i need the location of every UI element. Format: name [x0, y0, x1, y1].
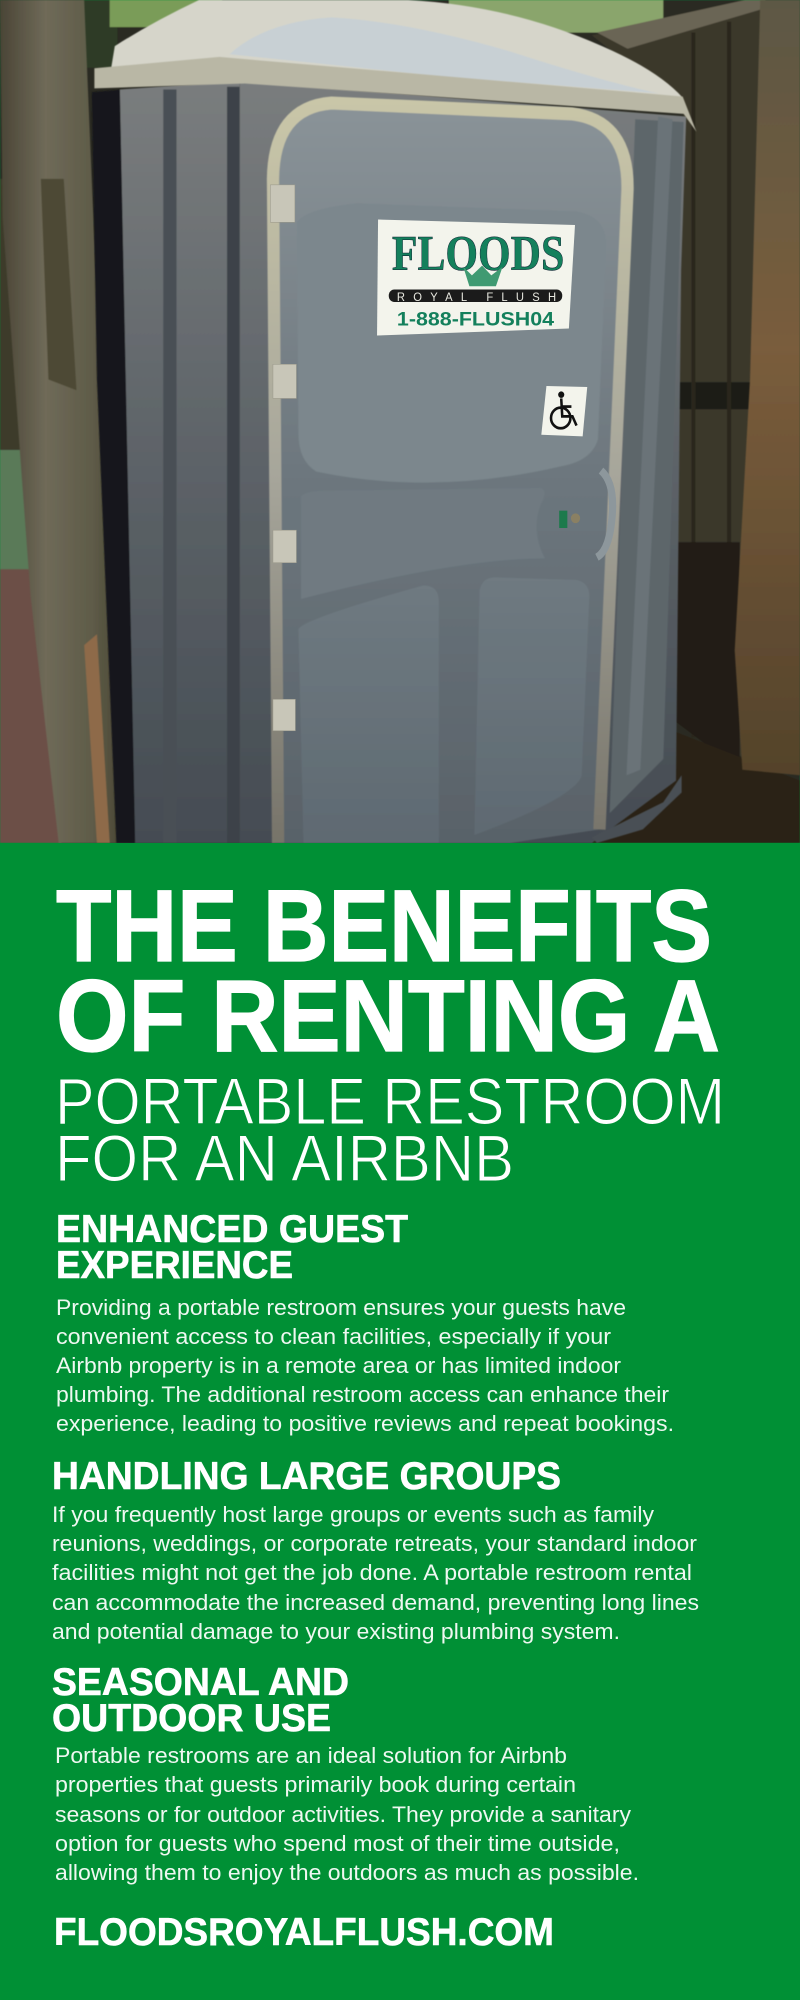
body text: seasonal and outdoor use: seasons or for outdoor activities. They provide a sanitary [55, 1802, 632, 1827]
heading: seasonal and outdoor use [52, 1661, 349, 1740]
door [273, 103, 628, 843]
right wooden post [735, 0, 800, 775]
body text: enhanced guest experience: convenient access to clean facilities, especially if your [56, 1324, 612, 1349]
body text: enhanced guest experience: Airbnb property is in a remote area or has limited indoor [56, 1353, 622, 1378]
title: FOR AN AIRBNB [55, 1121, 514, 1195]
sign: Floods Royal Flush logo [377, 220, 575, 336]
title: PORTABLE RESTROOM [55, 1064, 725, 1138]
body text: enhanced guest experience: experience, leading to positive reviews and repeat bookings. [56, 1411, 674, 1436]
body text: handling large groups [52, 1502, 699, 1644]
website footer: FLOODSROYALFLUSH.COM [54, 1911, 554, 1954]
section: enhanced guest experience [56, 1208, 674, 1436]
green content panel [0, 843, 800, 2000]
body text: enhanced guest experience [56, 1295, 674, 1436]
section: seasonal and outdoor use [52, 1661, 639, 1885]
body text: enhanced guest experience: Providing a portable restroom ensures your guests have [56, 1295, 626, 1320]
body text: enhanced guest experience: plumbing. The additional restroom access can enhance their [56, 1382, 670, 1407]
body text: handling large groups: can accommodate the increased demand, preventing long lines [52, 1590, 699, 1615]
heading: seasonal and outdoor use: SEASONAL AND [52, 1661, 349, 1704]
body text: handling large groups: facilities might not get the job done. A portable restroom rental [52, 1560, 692, 1585]
body text: handling large groups: reunions, weddings, or corporate retreats, your standard indoor [52, 1531, 698, 1556]
body text: handling large groups: If you frequently host large groups or events such as family [52, 1502, 655, 1527]
body text: handling large groups: and potential damage to your existing plumbing system. [52, 1619, 620, 1644]
door handle and lock [559, 471, 613, 557]
section: handling large groups [52, 1455, 699, 1644]
portable restroom body [92, 81, 686, 843]
body text: seasonal and outdoor use [55, 1743, 639, 1885]
body text: seasonal and outdoor use: properties that guests primarily book during certain [55, 1772, 576, 1797]
heading: enhanced guest experience: EXPERIENCE [56, 1244, 293, 1287]
heading: handling large groups: HANDLING LARGE GROUPS [52, 1455, 561, 1498]
body text: seasonal and outdoor use: option for guests who spend most of their time outside, [55, 1831, 620, 1856]
body text: seasonal and outdoor use: allowing them to enjoy the outdoors as much as possible. [55, 1860, 639, 1885]
sign: Floods Royal Flush logo: 1-888-FLUSH04 [397, 309, 555, 330]
photo background [0, 0, 800, 843]
door panels [297, 203, 606, 483]
title [55, 869, 725, 1195]
door frame [273, 103, 628, 843]
heading: enhanced guest experience [56, 1208, 408, 1287]
heading: enhanced guest experience: ENHANCED GUEST [56, 1208, 408, 1251]
sign: Floods Royal Flush logo: FLOODS [392, 226, 564, 281]
body text: seasonal and outdoor use: Portable restrooms are an ideal solution for Airbnb [55, 1743, 567, 1768]
title: OF RENTING A [56, 959, 720, 1073]
sign: wheelchair accessible [541, 386, 587, 436]
sign: Floods Royal Flush logo: ROYAL FLUSH [397, 292, 556, 304]
roof [94, 0, 696, 132]
hinges [270, 185, 296, 731]
title: THE BENEFITS [56, 869, 712, 983]
photo: portable restroom between wooden fence posts [0, 0, 800, 843]
heading: seasonal and outdoor use: OUTDOOR USE [52, 1697, 331, 1740]
left wooden post [0, 0, 130, 843]
